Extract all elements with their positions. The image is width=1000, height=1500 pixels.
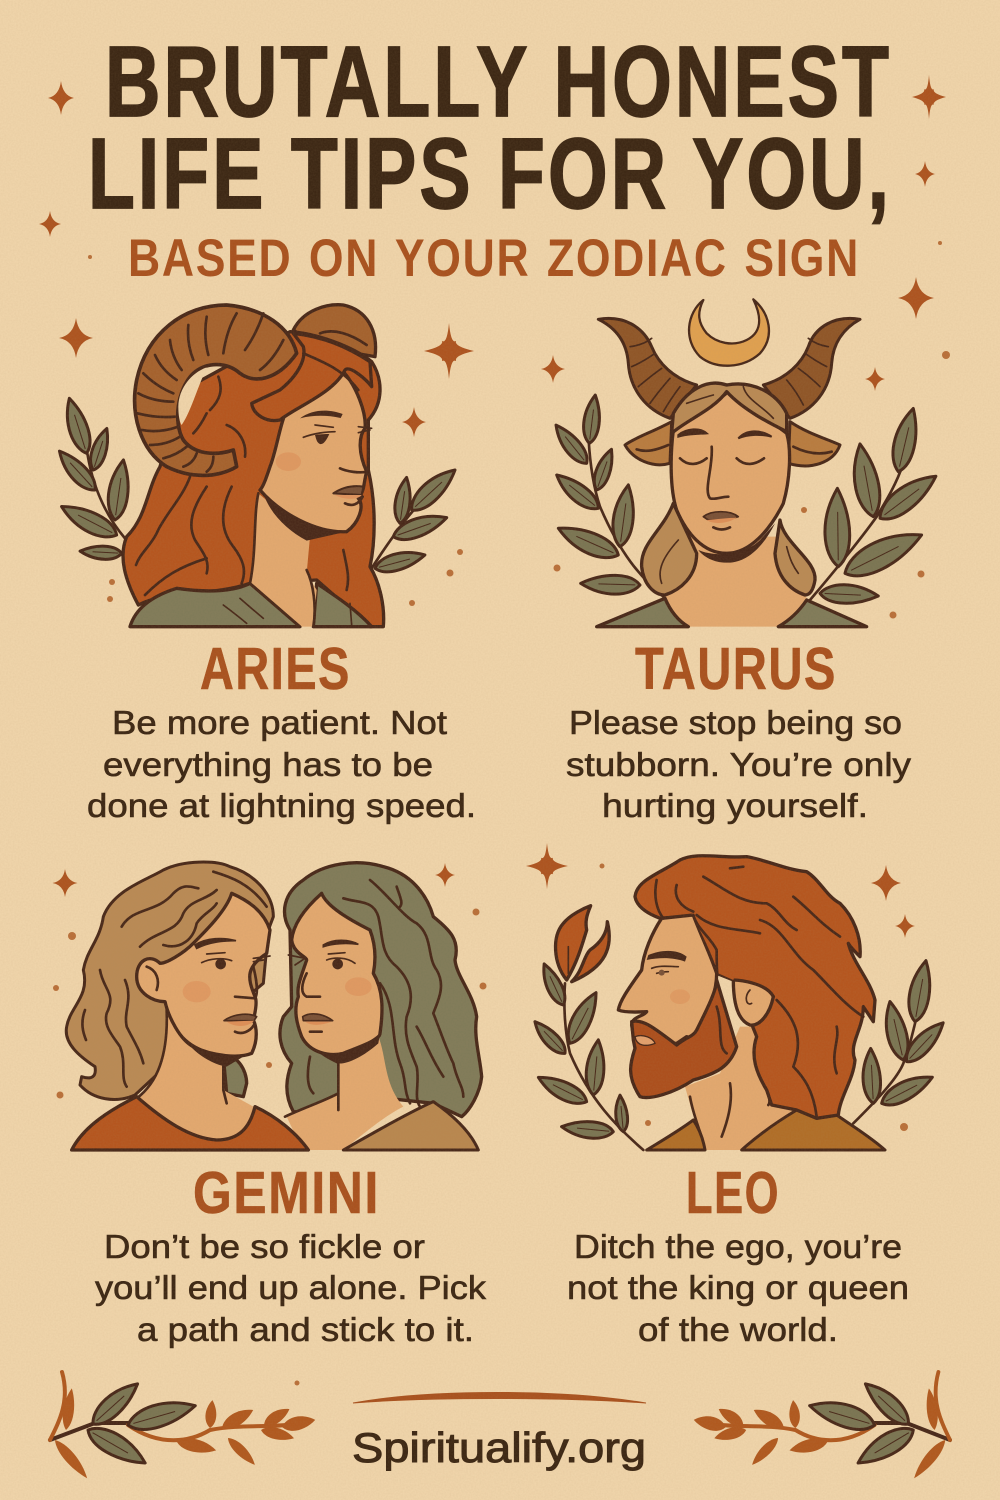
hair strand lines	[136, 331, 367, 595]
tip: Leo	[567, 1228, 909, 1348]
heading: Leo: LEO	[686, 1160, 780, 1226]
tip: Leo: of the world.	[638, 1311, 838, 1348]
right leaf sprig	[368, 463, 461, 576]
right leaf wreath	[853, 959, 949, 1123]
tip: Taurus: hurting yourself.	[602, 787, 868, 824]
hair front and strands	[655, 867, 863, 1117]
left leaf wreath	[530, 961, 643, 1150]
tip: Aries	[87, 704, 476, 824]
illustration: Aries woman with ram horns	[53, 305, 461, 627]
footer arc	[353, 1392, 646, 1403]
neck	[685, 1027, 797, 1150]
hair top	[672, 383, 787, 433]
panel: Aries	[87, 636, 476, 824]
hair bun	[293, 305, 376, 357]
tip: Taurus	[566, 704, 912, 824]
panel: Taurus	[566, 636, 912, 824]
right twin shirt	[343, 1102, 478, 1150]
left twin face	[137, 893, 270, 1067]
left leaf wreath	[550, 394, 663, 597]
crescent moon	[689, 299, 769, 366]
illustration: Taurus woman with bull horns and moon	[550, 299, 942, 627]
mouth	[635, 1036, 655, 1045]
tip: Taurus: Please stop being so	[569, 704, 902, 741]
beard	[631, 980, 737, 1098]
bull horns	[598, 318, 860, 418]
tip: Leo: not the king or queen	[567, 1269, 909, 1306]
heading: Taurus: TAURUS	[635, 636, 837, 702]
rust bud leaves	[556, 906, 609, 982]
hair sides	[642, 503, 815, 595]
right leaf wreath	[810, 406, 942, 605]
decorative sparkles and dots	[39, 75, 950, 1386]
illustration: Leo man with lion mane	[530, 856, 949, 1150]
shirt	[647, 1110, 885, 1150]
right twin face	[288, 893, 382, 1064]
left twin hair	[66, 862, 273, 1099]
face	[671, 392, 790, 563]
tip: Leo: Ditch the ego, you’re	[574, 1228, 902, 1265]
ears	[625, 422, 840, 466]
mane	[635, 856, 875, 1118]
face	[618, 915, 717, 1047]
neck	[250, 493, 317, 627]
neck	[665, 537, 807, 627]
left leaf sprig	[53, 396, 132, 560]
shirt	[130, 583, 372, 627]
tip: Gemini	[95, 1228, 487, 1348]
tip: Aries: everything has to be	[103, 746, 433, 783]
right twin neck	[287, 1037, 403, 1150]
tip: Taurus: stubborn. You’re only	[566, 746, 912, 783]
shirt	[597, 598, 867, 627]
tip: Gemini: you’ll end up alone. Pick	[95, 1269, 487, 1306]
back hair	[123, 332, 384, 627]
footer website: Spiritualify.org	[352, 1424, 646, 1471]
ear	[733, 980, 773, 1025]
right twin hair	[280, 863, 482, 1117]
footer right sprig	[692, 1372, 950, 1482]
panel: Gemini	[95, 1160, 487, 1348]
footer left sprig	[50, 1372, 317, 1482]
illustration: Gemini twin women face to face	[66, 862, 482, 1150]
title	[88, 26, 892, 230]
left twin neck	[137, 1010, 253, 1140]
front hair strand	[252, 333, 372, 421]
tip: Aries: done at lightning speed.	[87, 787, 476, 824]
right twin hair lines	[308, 880, 463, 1107]
tip: Gemini: Don’t be so fickle or	[104, 1228, 425, 1265]
panel: Leo	[567, 1160, 909, 1348]
subtitle: BASED ON YOUR ZODIAC SIGN	[128, 229, 860, 288]
left twin shirt	[72, 1097, 308, 1150]
ram horn	[135, 305, 297, 475]
heading: Gemini: GEMINI	[193, 1160, 380, 1226]
tip: Gemini: a path and stick to it.	[137, 1311, 474, 1348]
right twin hair behind neck	[223, 1056, 247, 1097]
face	[260, 372, 372, 541]
heading: Aries: ARIES	[200, 636, 351, 702]
tip: Aries: Be more patient. Not	[112, 704, 447, 741]
left twin hair lines	[82, 872, 267, 1087]
